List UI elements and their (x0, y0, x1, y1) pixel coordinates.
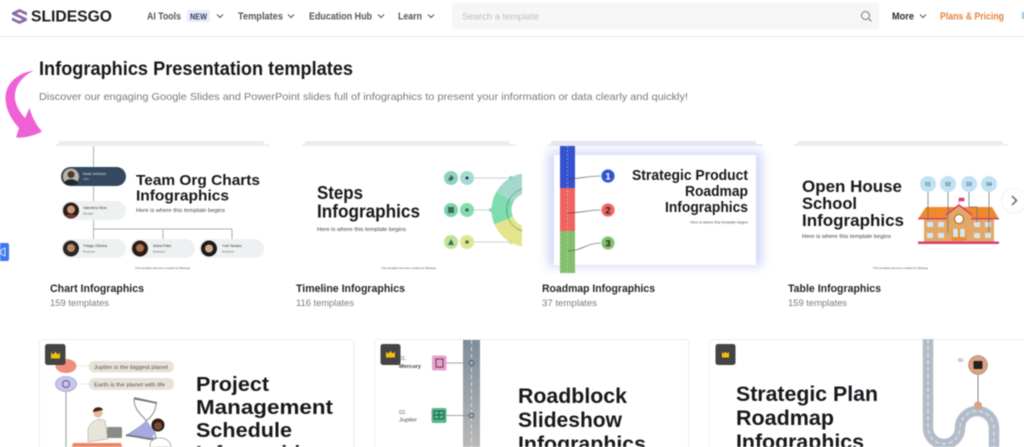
slide title: Roadmap (736, 406, 834, 430)
panel: project management schedule (40, 340, 354, 447)
illustration: school building (918, 192, 999, 244)
slide title: Management (196, 396, 333, 419)
slide title: Infographics (317, 200, 420, 222)
slide title: Strategic Product (632, 168, 748, 184)
side feedback button (0, 243, 9, 261)
timeline item: Earth: Earth is the planet with life (94, 382, 165, 388)
card label: Timeline Infographics (296, 283, 405, 295)
timeline item: Earth (56, 376, 174, 392)
person pill: Yuki Tanaka: Employee (222, 250, 234, 254)
person pill: Valentina Silva: Manager (83, 212, 94, 216)
slide title: Roadmap (685, 184, 748, 200)
slide title: Infographics (665, 200, 748, 216)
person pill: Valentina Silva: Valentina Silva (83, 206, 107, 210)
panel: table infographics: This template has been created by Slidesgo (873, 266, 928, 270)
person pill: Valentina Silva (61, 201, 126, 220)
link: plans and pricing: Plans & Pricing (940, 12, 1004, 22)
slide title: Strategic Plan (736, 382, 878, 406)
slide title (632, 168, 748, 216)
slide title: Infographics (136, 188, 229, 204)
card count: 116 templates (296, 298, 354, 309)
card count: 159 templates (50, 298, 109, 309)
slide title: Roadblock (518, 384, 627, 408)
person pill: Yuki Tanaka: Yuki Tanaka (222, 244, 241, 248)
person pill: Thiago Oliveira: Thiago Oliveira (83, 244, 107, 248)
step: Jupiter: Jupiter (399, 418, 417, 424)
step: Mercury: 01. (399, 356, 407, 362)
panel: roadmap infographics (542, 141, 762, 309)
panel: roadblock slideshow (374, 340, 688, 447)
slide title: Slideshow (518, 408, 622, 432)
step 1 (601, 169, 615, 183)
slide title: Team Org Charts (136, 172, 260, 189)
person pill: Yuki Tanaka (199, 239, 264, 258)
timeline item: Jupiter: Jupiter is the biggest planet (94, 365, 168, 371)
premium badge (45, 344, 66, 365)
slide title (736, 382, 878, 447)
step 1: 1 (605, 172, 611, 182)
search box (452, 3, 879, 29)
slide title: Infographics (802, 212, 904, 230)
person pill: Noah Johnson: CEO (83, 177, 89, 181)
person pill: Aisha Patel (130, 239, 195, 258)
panel: chart infographics (50, 141, 270, 309)
winding road (928, 339, 994, 447)
number bubbles: 04 (986, 182, 992, 188)
number bubbles: 01 (925, 182, 931, 188)
timeline item: Jupiter (56, 359, 174, 373)
card label: Chart Infographics (50, 283, 144, 295)
step 3 (601, 236, 615, 250)
number bubbles: 03 (966, 182, 972, 188)
logo: SLIDESGO (31, 8, 112, 26)
person pill: Noah Johnson (61, 167, 126, 186)
slide title: School (802, 195, 857, 213)
premium badge (380, 344, 400, 365)
panel: strategic plan roadmap (710, 339, 1024, 447)
slide title: Project (196, 373, 269, 396)
milestone 02 (958, 356, 988, 410)
person pill: Thiago Oliveira: Employee (83, 250, 95, 254)
card count: 37 templates (542, 298, 597, 309)
menu: AI Tools: AI Tools (147, 12, 181, 22)
navigation bar (0, 3, 1024, 37)
panel: table infographics (788, 141, 1008, 309)
slide title: Open House (802, 178, 902, 196)
person pill: Noah Johnson: Noah Johnson (83, 172, 106, 176)
panel: roadmap infographics: Here is where this template begins (690, 220, 748, 224)
step 2: 2 (605, 206, 611, 216)
slide title (317, 182, 420, 222)
step 2 (601, 203, 615, 217)
menu: Education Hub: Education Hub (309, 12, 372, 22)
arrow: pink pointer (5, 70, 42, 138)
step: Mercury: Mercury (399, 364, 422, 370)
menu: More: More (892, 12, 914, 22)
slide title (802, 178, 904, 230)
panel: chart infographics: Here is where this template begins (136, 208, 225, 214)
number bubbles: 02 (945, 182, 951, 188)
person pill: Thiago Oliveira (61, 239, 126, 258)
illustration: people with hourglass (72, 398, 171, 447)
search box: Search a template (462, 12, 539, 22)
slide title: Steps (317, 182, 363, 203)
card count: 159 templates (788, 298, 847, 309)
badge: new: NEW (190, 12, 208, 22)
step 3: 3 (605, 238, 611, 250)
slide title (518, 384, 646, 447)
panel: timeline infographics: Here is where this template begins (317, 227, 406, 233)
menu: Templates: Templates (238, 12, 283, 22)
person pill: Aisha Patel: Aisha Patel (153, 244, 171, 248)
subtitle: Discover our engaging Google Slides and PowerPoint slides full of infographics to present your information or data clearly and quickly! (39, 91, 688, 103)
number bubbles (920, 176, 997, 192)
milestone 02: 02. (958, 358, 964, 362)
panel: timeline infographics (296, 141, 529, 309)
person pill: Aisha Patel: Employee (153, 250, 165, 254)
step: Jupiter (399, 408, 474, 424)
panel: table infographics: Here is where this template begins (802, 234, 891, 240)
panel: chart infographics: This template has been created by Slidesgo (135, 266, 190, 270)
slide title (196, 373, 333, 447)
panel: timeline infographics: This template has been created by Slidesgo (381, 266, 436, 270)
slide title: Schedule (196, 419, 292, 442)
carousel next button (1002, 188, 1024, 213)
menu: Learn: Learn (398, 12, 422, 22)
premium badge (716, 344, 736, 365)
title: Infographics Presentation templates (39, 59, 353, 80)
semicircle steps diagram (444, 171, 529, 249)
slide title (136, 172, 260, 204)
step: Jupiter: 02. (399, 410, 407, 416)
card label: Roadmap Infographics (542, 283, 655, 295)
step: Mercury (399, 356, 474, 370)
roadmap stripe (560, 146, 601, 273)
road (463, 340, 480, 447)
card label: Table Infographics (788, 283, 881, 295)
